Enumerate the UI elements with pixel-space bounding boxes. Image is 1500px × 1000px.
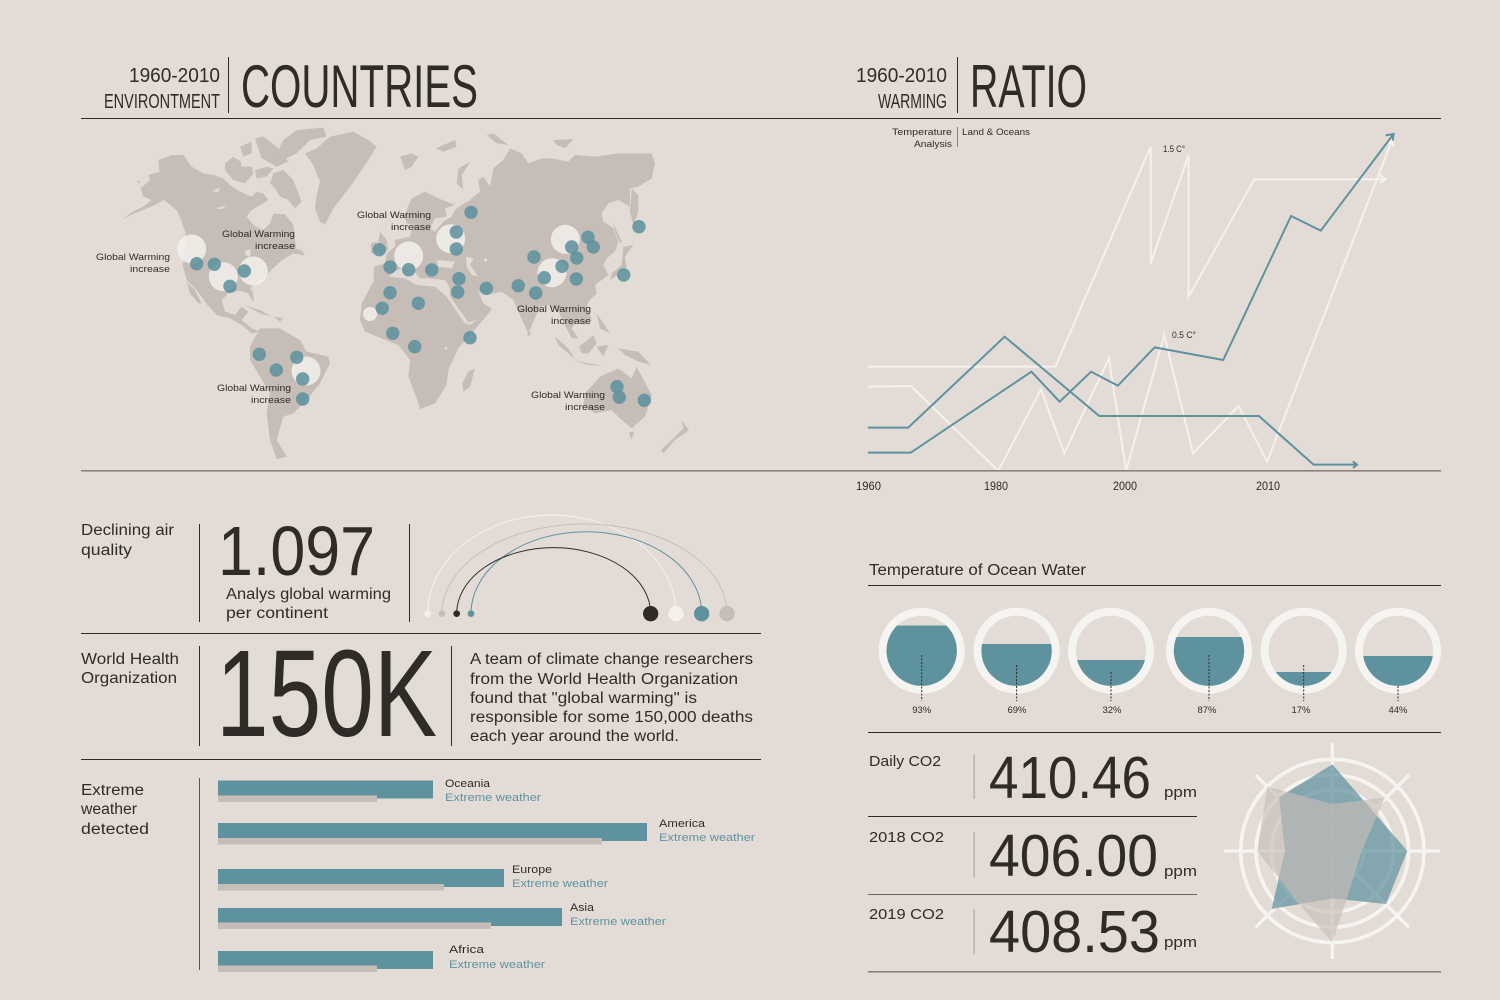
co2 stat: daily xyxy=(869,744,1197,811)
ocean gauges: 17% xyxy=(1291,705,1311,716)
co2 stat: 2019: 2019 CO2 xyxy=(869,906,944,923)
map: warming hotspots xyxy=(177,224,580,386)
paragraph xyxy=(470,651,753,745)
map labels: increase xyxy=(551,316,591,327)
paragraph: from the World Health Organization xyxy=(470,671,738,688)
bar chart: extreme weather: Asia xyxy=(570,902,595,914)
header: countries: ENVIRONTMENT xyxy=(104,91,220,113)
stat: declining air quality xyxy=(81,512,410,622)
chart axis years: 1960 xyxy=(856,479,881,493)
bar chart: extreme weather: detected xyxy=(81,821,149,838)
chart peak labels: 1.5 C° xyxy=(1163,144,1185,155)
map labels: increase xyxy=(130,264,170,275)
stat: world health organization: Organization xyxy=(81,670,177,687)
chart axis years: 2010 xyxy=(1256,479,1280,493)
map labels: Global Warming xyxy=(357,210,431,221)
map labels: increase xyxy=(255,241,295,252)
header: countries: COUNTRIES xyxy=(241,53,478,120)
header: countries xyxy=(104,53,478,120)
co2 stat: daily: 410.46 xyxy=(989,744,1151,811)
co2 stat: 2018: 2018 CO2 xyxy=(869,829,944,846)
header: ratio: WARMING xyxy=(878,91,947,113)
map: data points xyxy=(190,206,651,407)
stat: world health organization: World Health xyxy=(81,651,179,668)
map labels: increase xyxy=(565,402,605,413)
co2 stat: 2019: 408.53 xyxy=(989,898,1160,965)
map labels: Global Warming xyxy=(96,252,170,263)
chart peak labels: 0.5 C° xyxy=(1172,330,1196,341)
bar chart: extreme weather: Extreme weather xyxy=(659,832,755,844)
chart legend: Temperature xyxy=(892,127,952,138)
bar chart: extreme weather: Europe xyxy=(512,864,552,876)
map: north america and greenland xyxy=(122,128,377,333)
map labels: increase xyxy=(391,222,431,233)
radar chart xyxy=(1224,743,1440,959)
map: africa, oceania and southeast asia xyxy=(360,277,689,453)
co2 stat: 2019: ppm xyxy=(1164,935,1197,951)
paragraph: each year around the world. xyxy=(470,728,679,745)
bar chart: extreme weather: weather xyxy=(80,801,137,818)
chart peak labels xyxy=(1163,144,1196,341)
map labels: increase xyxy=(251,395,291,406)
header: countries: 1960-2010 xyxy=(129,65,220,87)
bar chart: extreme weather: Extreme weather xyxy=(570,916,666,928)
header: ratio xyxy=(856,53,1087,120)
stat: declining air quality: 1.097 xyxy=(218,512,375,590)
map labels: Global Warming xyxy=(531,390,605,401)
chart legend: Analysis xyxy=(914,139,952,150)
co2 stat: 2018: ppm xyxy=(1164,864,1197,880)
chart lines xyxy=(868,134,1394,471)
bar chart: extreme weather: Africa xyxy=(449,944,485,956)
bar chart: extreme weather: Extreme weather xyxy=(512,878,608,890)
header: ratio: RATIO xyxy=(970,53,1087,120)
chart legend: Land & Oceans xyxy=(962,127,1030,138)
bar chart: extreme weather: Oceania xyxy=(445,778,491,790)
bar chart: extreme weather: Extreme weather xyxy=(445,792,541,804)
bar chart: extreme weather: Extreme weather xyxy=(449,959,545,971)
map labels: Global Warming xyxy=(217,383,291,394)
stat: declining air quality: per continent xyxy=(226,605,329,622)
co2 stat: 2019 xyxy=(869,898,1197,965)
map labels: Global Warming xyxy=(517,304,591,315)
world map xyxy=(96,128,689,459)
ocean gauges: 87% xyxy=(1197,705,1217,716)
map labels: Global Warming xyxy=(222,229,295,240)
co2 stat: 2018 xyxy=(869,822,1197,889)
co2 stat: 2018: 406.00 xyxy=(989,822,1158,889)
ocean gauges xyxy=(880,612,1440,716)
paragraph: responsible for some 150,000 deaths xyxy=(470,709,753,726)
heading: temperature of ocean water: Temperature of Ocean Water xyxy=(869,562,1086,579)
ocean gauges: 44% xyxy=(1388,705,1408,716)
map: eurasia xyxy=(371,133,655,338)
map labels xyxy=(96,210,605,413)
ocean gauges: 69% xyxy=(1007,705,1027,716)
stat: world health organization xyxy=(81,626,753,763)
ocean gauges: 93% xyxy=(912,705,932,716)
bar chart: extreme weather xyxy=(80,778,755,972)
chart axis years xyxy=(856,479,1280,493)
stat: declining air quality: Analys global warming xyxy=(226,586,391,603)
stat: world health organization: 150K xyxy=(216,626,437,763)
chart axis years: 2000 xyxy=(1113,479,1137,493)
chart axis years: 1980 xyxy=(984,479,1008,493)
map: south america xyxy=(250,328,330,459)
stat: declining air quality: quality xyxy=(81,542,132,559)
arc chart xyxy=(424,515,735,621)
stat: declining air quality: Declining air xyxy=(81,522,174,539)
bar chart: extreme weather: America xyxy=(659,818,706,830)
paragraph: A team of climate change researchers xyxy=(470,651,753,668)
chart legend xyxy=(892,127,1030,150)
header: ratio: 1960-2010 xyxy=(856,65,947,87)
line chart xyxy=(81,127,1441,493)
ocean gauges: 32% xyxy=(1102,705,1122,716)
paragraph: found that "global warming" is xyxy=(470,690,697,707)
co2 stat: daily: ppm xyxy=(1164,785,1197,801)
co2 stat: daily: Daily CO2 xyxy=(869,753,941,770)
bar chart: extreme weather: Extreme xyxy=(81,782,144,799)
